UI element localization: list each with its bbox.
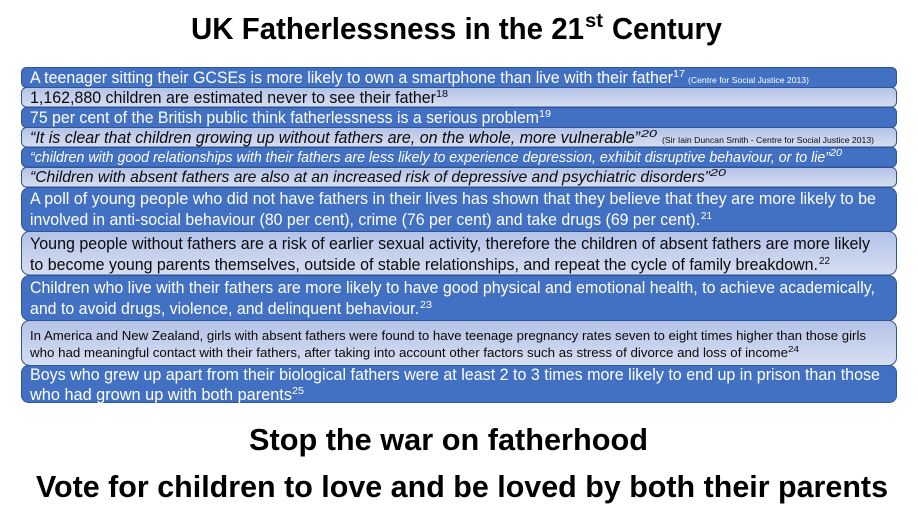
title: Century [612,11,723,46]
row: smartphone statistic: 17 [673,69,685,80]
row: children living with fathers: Children who live with their fathers are more likely to have good physical and emotional health, to achieve academically, [30,279,875,297]
row: absent fathers risk quote: “Children with absent fathers are also at an increased risk of depressive and psychiatric disorders” [30,169,711,186]
row: children living with fathers: and to avoid drugs, violence, and delinquent behaviour. [30,300,419,318]
row: Duncan Smith quote [22,128,896,147]
row: Duncan Smith quote: “It is clear that children growing up without fathers are, on the whole, more vulnerable” [30,129,641,147]
row: earlier sexual activity: 22 [819,256,830,267]
row: children never seeing father [22,88,896,107]
row: good relationships quote: “children with good relationships with their fathers are less likely to experience depression, exhibit disruptive behaviour, or to lie” [30,150,831,166]
row: teenage pregnancy rates: 24 [788,344,799,354]
row: absent fathers risk quote: 20 [709,168,727,179]
row: children living with fathers: 23 [420,300,432,311]
row: earlier sexual activity [22,232,896,275]
title: st [585,11,604,32]
row: boys and prison: Boys who grew up apart from their biological fathers were at least 2 to 3 times more likely to end up in prison than those [30,366,880,384]
row: boys and prison: who had grown up with both parents [29,386,292,404]
row: smartphone statistic [22,68,896,88]
slogan: vote for children: Vote for children to love and be loved by both their parents [36,469,888,504]
panel: statistics list [22,68,896,404]
row: British public opinion [22,108,896,128]
row: boys and prison: 25 [292,386,304,397]
row: smartphone statistic: (Centre for Social Justice 2013) [688,75,809,85]
row: poll of young people: involved in anti-social behaviour (80 per cent), crime (76 per cent) and take drugs (69 per cent). [30,211,700,229]
row: teenage pregnancy rates: In America and New Zealand, girls with absent fathers were found to have teenage pregnancy rates seven to eight times higher than those girls [30,328,867,343]
row: poll of young people [22,188,896,232]
title: UK Fatherlessness in the 21 [191,11,584,46]
row: British public opinion: 75 per cent of the British public think fatherlessness is a serious problem [30,109,539,127]
row: Duncan Smith quote: (Sir Iain Duncan Smith - Centre for Social Justice 2013) [662,135,874,145]
row: British public opinion: 19 [539,109,551,120]
row: poll of young people: 21 [701,211,712,222]
row: good relationships quote: 20 [829,148,842,159]
row: smartphone statistic: A teenager sitting their GCSEs is more likely to own a smartphone than live with their father [30,69,673,87]
row: earlier sexual activity: to become young parents themselves, outside of stable relationships, and repeat the cycle of family breakdown. [30,256,818,274]
row: children living with fathers [22,276,896,320]
row: teenage pregnancy rates: who had meaningful contact with their fathers, after taking into account other factors such as stress of divorce and loss of income [29,345,788,360]
row: absent fathers risk quote [22,168,896,187]
row: teenage pregnancy rates [22,320,896,366]
slogan: stop the war: Stop the war on fatherhood [249,422,648,457]
row: Duncan Smith quote: 20 [640,129,658,140]
row: poll of young people: A poll of young people who did not have fathers in their lives has shown that they believe that they are more likely to be [30,190,876,208]
row: boys and prison [22,366,896,404]
row: children never seeing father: 1,162,880 children are estimated never to see their father [30,89,436,107]
row: children never seeing father: 18 [436,89,448,100]
row: earlier sexual activity: Young people without fathers are a risk of earlier sexual activity, therefore the children of absent fathers are more likely [30,235,871,253]
